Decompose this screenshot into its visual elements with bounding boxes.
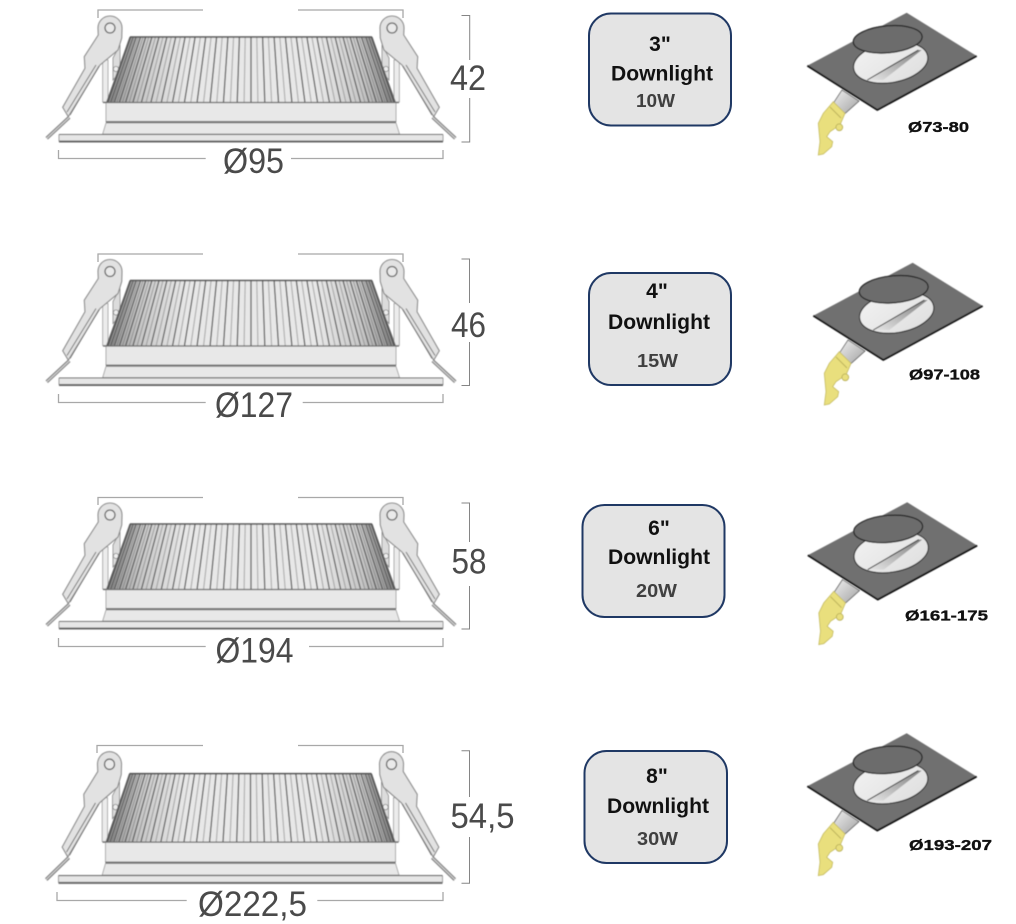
label box: 4 inch 15W: 15W [637, 351, 678, 371]
label box: 4 inch 15W [589, 273, 731, 385]
height dimension 46 [451, 259, 486, 386]
technical drawing: 8 inch downlight [46, 752, 455, 883]
top bracket line [97, 746, 403, 753]
label box: 6 inch 20W: Downlight [608, 546, 710, 569]
row 3: 6 inch downlight [47, 498, 988, 670]
technical drawing: 4 inch downlight [47, 260, 455, 386]
label box: 3 inch 10W: 3" [649, 33, 671, 56]
technical drawing: 6 inch downlight [47, 503, 455, 629]
diameter dimension 222,5: Ø222,5 [198, 884, 307, 924]
label box: 3 inch 10W: 10W [636, 91, 675, 111]
label box: 8 inch 30W [584, 751, 727, 863]
diameter dimension 127 [58, 385, 443, 425]
cut-out size label: Ø193-207 [909, 837, 992, 854]
label box: 3 inch 10W: Downlight [611, 62, 713, 86]
diameter dimension 95 [58, 141, 443, 181]
label box: 8 inch 30W: 30W [637, 829, 678, 849]
diameter dimension 194 [58, 630, 443, 670]
top bracket line [98, 10, 403, 18]
diameter dimension 222,5 [57, 884, 443, 924]
cut-out icon: 97-108 [813, 263, 983, 405]
cut-out icon: 193-207 [807, 733, 977, 876]
label box: 8 inch 30W: 8" [646, 765, 668, 788]
label box: 8 inch 30W: Downlight [607, 795, 709, 818]
cut-out size label: Ø73-80 [908, 119, 969, 136]
cut-out size label: Ø161-175 [905, 608, 988, 624]
technical drawing: 3 inch downlight [47, 16, 455, 142]
height dimension 42 [450, 16, 486, 142]
height dimension 58 [452, 503, 486, 629]
cut-out icon: 73-80 [807, 13, 977, 155]
height dimension 58: 58 [452, 542, 486, 582]
height dimension 46: 46 [451, 305, 486, 345]
diameter dimension 194: Ø194 [216, 630, 294, 670]
row 2: 4 inch downlight [47, 254, 983, 425]
diameter dimension 95: Ø95 [223, 141, 284, 181]
cut-out size label: Ø97-108 [909, 366, 980, 384]
row 4: 8 inch downlight [46, 733, 992, 924]
height dimension 42: 42 [450, 58, 486, 98]
cut-out icon: 161-175 [808, 502, 977, 645]
row 1: 3 inch downlight [47, 10, 977, 181]
label box: 4 inch 15W: Downlight [608, 311, 710, 334]
label box: 4 inch 15W: 4" [646, 280, 668, 303]
label box: 3 inch 10W [589, 14, 731, 126]
label box: 6 inch 20W: 6" [648, 517, 670, 540]
diameter dimension 127: Ø127 [215, 385, 293, 425]
top bracket line [98, 254, 403, 262]
height dimension 54,5 [450, 751, 514, 883]
top bracket line [98, 498, 403, 505]
height dimension 54,5: 54,5 [450, 796, 514, 836]
label box: 6 inch 20W: 20W [636, 581, 677, 601]
label box: 6 inch 20W [582, 505, 724, 617]
